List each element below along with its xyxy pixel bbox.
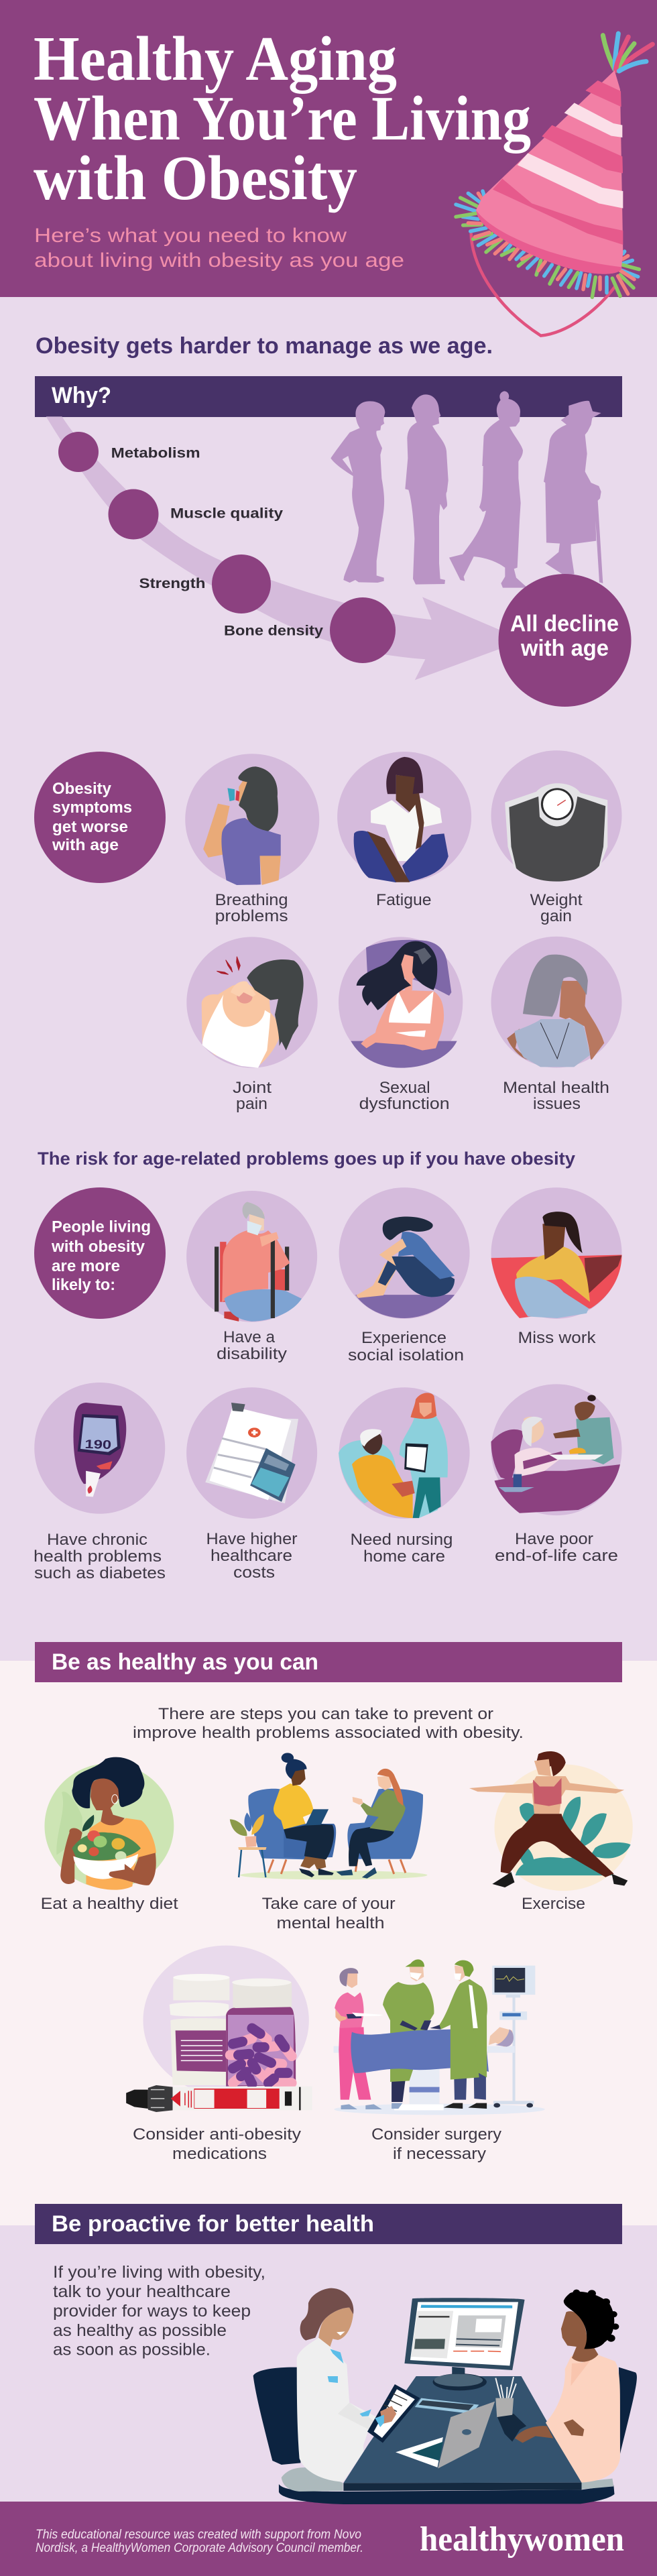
callout: all decline with age: All decline — [510, 611, 619, 637]
symptom labels: dysfunction — [359, 1095, 450, 1113]
decline silhouettes — [331, 391, 603, 588]
subtitle: Here’s what you need to know — [34, 225, 347, 247]
risk labels — [34, 1328, 618, 1582]
subtitle — [34, 225, 404, 272]
icon: anti-obesity medications — [126, 1946, 312, 2112]
text block: steps intro — [133, 1705, 524, 1742]
icon: sexual dysfunction — [339, 937, 463, 1068]
logo: healthywomen: healthywomen — [420, 2520, 624, 2559]
healthy steps labels: Eat a healthy diet — [41, 1895, 178, 1913]
illustration: doctor and patient consultation — [253, 2288, 637, 2504]
text block: talk to your provider: If you’re living with obesity, — [53, 2263, 265, 2282]
footer credit — [36, 2528, 363, 2555]
callout: people living with obesity: People living — [52, 1218, 151, 1236]
arrow: decline curve — [46, 416, 524, 680]
icon: glucose meter: 190 — [84, 1437, 112, 1452]
icon: mental health — [491, 937, 622, 1067]
callout: all decline with age — [499, 574, 632, 707]
healthy steps labels — [41, 1895, 585, 2163]
stage: muscle quality — [109, 489, 283, 539]
callout: all decline with age: with age — [520, 636, 609, 661]
risk labels: Have chronic — [47, 1531, 147, 1549]
callout: symptoms get worse: with age — [52, 836, 119, 854]
title: with Obesity — [34, 143, 357, 213]
symptom labels: Sexual — [379, 1079, 430, 1097]
symptom labels: Joint — [233, 1079, 272, 1097]
risk labels: end-of-life care — [495, 1547, 618, 1565]
healthy steps labels: Take care of your — [262, 1895, 396, 1913]
risk labels: Have a — [223, 1328, 276, 1346]
callout: people living with obesity: with obesity — [51, 1238, 145, 1256]
panel: risk icons — [34, 1187, 622, 1519]
symptom labels: problems — [215, 907, 288, 925]
icon: exercise — [469, 1751, 633, 1891]
risk labels: home care — [363, 1547, 445, 1566]
healthy steps labels: if necessary — [393, 2145, 486, 2163]
icon: joint pain — [186, 937, 318, 1068]
text block: steps intro: There are steps you can take to prevent or — [158, 1705, 493, 1723]
callout: people living with obesity: are more — [52, 1257, 120, 1275]
icon: glucose meter — [34, 1383, 165, 1514]
stage: bone density — [224, 597, 396, 663]
stage: strength: Strength — [139, 576, 205, 591]
risk labels: such as diabetes — [34, 1564, 166, 1582]
icon: party hat — [456, 34, 652, 336]
text block: talk to your provider: as soon as possible. — [53, 2340, 211, 2359]
icon: healthcare costs — [186, 1387, 317, 1519]
banner: be as healthy as you can — [35, 1642, 622, 1682]
healthy steps labels: Consider anti-obesity — [133, 2125, 301, 2144]
icon: weight gain — [491, 750, 622, 882]
symptom labels: Weight — [530, 891, 583, 909]
banner: be proactive — [35, 2204, 622, 2244]
title — [34, 24, 531, 213]
symptom labels — [215, 891, 609, 1113]
stage: bone density: Bone density — [224, 624, 323, 638]
panel: symptom icons — [185, 750, 622, 1068]
risk labels: Have higher — [206, 1530, 298, 1548]
icon: social isolation — [339, 1187, 470, 1319]
risk labels: costs — [233, 1564, 275, 1582]
title: When You’re Living — [34, 84, 531, 154]
banner: why: Why? — [52, 383, 111, 408]
text block: talk to your provider: talk to your healthcare — [53, 2282, 231, 2301]
symptom labels: Fatigue — [376, 891, 432, 909]
icon: breathing problems — [185, 754, 319, 885]
healthy steps labels: medications — [172, 2145, 267, 2163]
risk labels: disability — [217, 1345, 287, 1363]
callout: symptoms get worse: get worse — [52, 818, 128, 836]
callout: people living with obesity: likely to: — [52, 1276, 115, 1294]
heading: risk for age-related problems: The risk for age-related problems goes up if you have obesity — [38, 1149, 575, 1169]
icon: fatigue — [337, 752, 471, 882]
text block: steps intro: improve health problems associated with obesity. — [133, 1724, 524, 1742]
symptom labels: Breathing — [215, 891, 288, 909]
callout: symptoms get worse: Obesity — [52, 780, 112, 798]
risk labels: health problems — [34, 1547, 162, 1566]
callout: symptoms get worse — [34, 752, 166, 883]
stage: metabolism — [58, 432, 200, 472]
icon: nursing home care — [339, 1387, 470, 1519]
banner: why — [35, 376, 622, 417]
panel: healthy steps illustrations — [44, 1751, 633, 2115]
banner: be as healthy as you can: Be as healthy as you can — [52, 1649, 318, 1675]
icon: miss work — [491, 1187, 622, 1319]
risk labels: social isolation — [348, 1346, 464, 1364]
decline stages — [58, 432, 396, 663]
header band — [0, 0, 657, 297]
healthy steps labels: Consider surgery — [371, 2125, 501, 2144]
risk labels: Miss work — [518, 1329, 597, 1347]
risk labels: Need nursing — [350, 1531, 453, 1549]
subtitle: about living with obesity as you age — [34, 249, 404, 272]
banner: be proactive: Be proactive for better health — [52, 2211, 374, 2237]
text block: talk to your provider: provider for ways to keep — [53, 2302, 251, 2321]
risk labels: Have poor — [515, 1530, 593, 1548]
stage: strength — [139, 554, 271, 613]
symptom labels: Mental health — [503, 1079, 609, 1097]
icon: surgery — [334, 1959, 545, 2115]
text block: talk to your provider — [53, 2263, 265, 2359]
healthy steps labels: mental health — [276, 1914, 385, 1932]
healthy steps labels: Exercise — [522, 1895, 585, 1913]
icon: end-of-life care — [491, 1384, 622, 1515]
icon: therapy session — [230, 1753, 427, 1879]
symptom labels: gain — [540, 907, 572, 925]
risk labels: healthcare — [211, 1547, 292, 1565]
panel: pale healthy section background — [0, 1661, 657, 2225]
footer band — [0, 2502, 657, 2576]
symptom labels: issues — [533, 1095, 581, 1113]
footer credit: Nordisk, a HealthyWomen Corporate Advisory Council member. — [36, 2541, 363, 2555]
icon: healthy diet — [44, 1757, 174, 1890]
callout: symptoms get worse: symptoms — [52, 799, 132, 817]
stage: muscle quality: Muscle quality — [170, 506, 283, 522]
risk labels: Experience — [361, 1329, 446, 1347]
icon: disability — [186, 1191, 317, 1322]
callout: people living with obesity — [34, 1187, 166, 1319]
heading: obesity gets harder: Obesity gets harder to manage as we age. — [36, 333, 493, 359]
stage: metabolism: Metabolism — [111, 445, 200, 461]
symptom labels: pain — [236, 1095, 267, 1113]
footer credit: This educational resource was created with support from Novo — [36, 2528, 361, 2542]
title: Healthy Aging — [34, 24, 397, 94]
text block: talk to your provider: as healthy as possible — [53, 2321, 227, 2340]
